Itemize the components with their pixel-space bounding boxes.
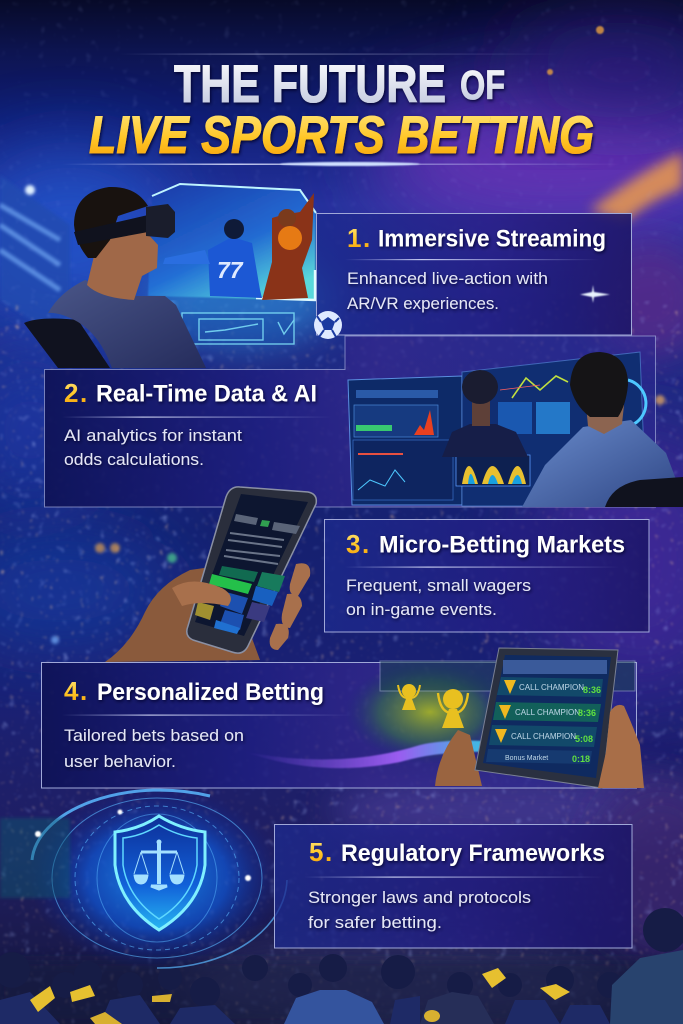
description: odds calculations. [64, 450, 204, 469]
heading: 4. [64, 676, 89, 706]
description [64, 726, 244, 771]
green field glow [345, 660, 515, 764]
description [308, 888, 531, 932]
circular glow [29, 786, 285, 970]
orange player [262, 193, 314, 300]
heading: 1. [347, 223, 372, 253]
tablet: CALL CHAMPION [519, 683, 584, 692]
description: AR/VR experiences. [347, 294, 499, 313]
description: AI analytics for instant [64, 426, 242, 445]
title word: of: OF [460, 62, 505, 108]
description [64, 426, 242, 469]
description [346, 576, 531, 619]
panel 4: Personalized Betting [42, 648, 644, 788]
tablet [475, 648, 618, 788]
illustration: person in VR headset with hologram [24, 184, 335, 368]
panel box [316, 214, 632, 335]
tablet: 0:18 [572, 754, 590, 764]
top decorative line [120, 54, 560, 55]
description: on in-game events. [346, 600, 497, 619]
blue player number 77 [163, 219, 262, 298]
small hud panels [182, 313, 294, 344]
illustration: hand holding a phone [105, 487, 316, 662]
tablet: 5:08 [575, 734, 593, 744]
VR headset [74, 204, 175, 245]
tablet: 8:36 [578, 708, 596, 718]
shirt and shoulders [48, 280, 206, 368]
panel box [274, 824, 632, 948]
panel box [42, 662, 636, 788]
blue player number 77: 77 [217, 257, 244, 283]
title [62, 54, 622, 166]
heading: 3. [346, 529, 371, 559]
heading: Immersive Streaming [378, 226, 606, 252]
heading: Micro-Betting Markets [379, 532, 625, 558]
heading: Regulatory Frameworks [341, 840, 605, 867]
description: Frequent, small wagers [346, 576, 531, 595]
sparkles [35, 810, 251, 881]
left hand holding tablet [435, 730, 482, 786]
trophies [398, 684, 468, 728]
description: user behavior. [64, 752, 176, 771]
tablet: 8:36 [583, 685, 601, 695]
shield body [115, 816, 205, 930]
panel 2: Real-Time Data and AI [44, 336, 683, 507]
description: for safer betting. [308, 913, 442, 932]
panel box [44, 336, 656, 507]
heading: 5. [309, 837, 334, 867]
hologram screen [148, 184, 316, 300]
tablet: Bonus Market [505, 755, 548, 762]
phone body [187, 487, 316, 653]
heading: Real-Time Data & AI [96, 380, 317, 408]
analyst seen from behind [442, 370, 528, 457]
panel 5: Regulatory Frameworks [274, 824, 632, 948]
description: Stronger laws and protocols [308, 888, 531, 907]
description [347, 269, 548, 313]
swoosh [245, 741, 500, 768]
tablet: CALL CHAMPION [511, 732, 576, 741]
description: Enhanced live-action with [347, 269, 548, 288]
scales icon [134, 840, 184, 889]
screen behind tablet [380, 661, 635, 691]
hand back [105, 565, 260, 662]
panel 3: Micro-Betting Markets [324, 520, 649, 632]
analyst with blue shirt [522, 352, 683, 507]
shield emblem with scales of justice [0, 786, 287, 970]
crowd silhouettes at the bottom [0, 908, 683, 1024]
fingers and thumb [172, 563, 310, 650]
tablet: CALL CHAMPION [515, 708, 580, 717]
description: Tailored bets based on [64, 726, 244, 745]
icon: football [314, 311, 342, 339]
title underline [62, 162, 622, 166]
panel box [324, 520, 649, 632]
panel 1: Immersive Streaming [316, 214, 632, 335]
phone screen [195, 494, 308, 636]
right hand holding tablet [598, 705, 644, 788]
hologram glow [145, 255, 335, 345]
neck and head [74, 187, 158, 300]
heading: Personalized Betting [97, 679, 324, 706]
heading: 2. [64, 378, 89, 408]
chair [24, 319, 110, 368]
title line 2: LIVE SPORTS BETTING [89, 106, 594, 165]
analytics monitors [348, 352, 646, 506]
left data grid [0, 818, 70, 898]
title line 1: THE FUTURE [174, 55, 446, 114]
data rings [32, 790, 287, 968]
